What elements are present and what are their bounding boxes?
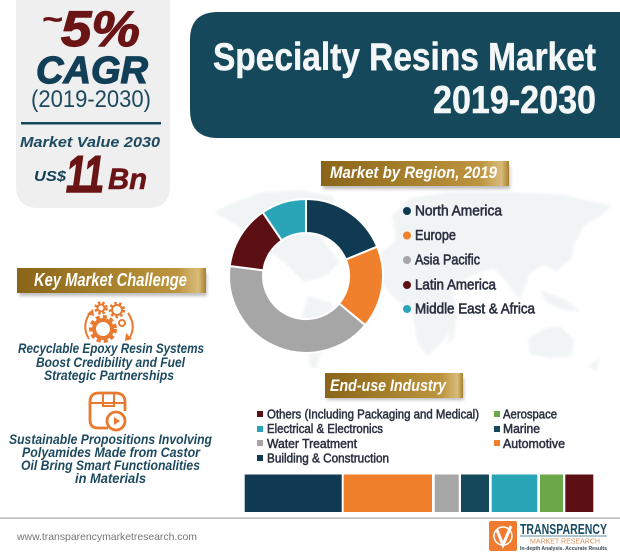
donut chart: market by region (229, 199, 383, 353)
heading: Key Market Challenge (17, 268, 207, 296)
icon: gears with arrows (85, 302, 133, 341)
CAGR value: 5% (61, 1, 140, 57)
title banner (190, 12, 620, 138)
legend item: Water Treatment: Water Treatment (267, 437, 358, 451)
panel: CAGR and market value (16, 0, 170, 208)
segment: Asia Pacific (229, 266, 365, 353)
heading: End-use Industry: End-use Industry (330, 376, 447, 395)
text: first challenge: Boost Credibility and Fuel (36, 354, 186, 370)
heading: Market by Region (321, 161, 510, 189)
legend item: Marine: Marine (503, 422, 540, 436)
segment: Latin America (230, 212, 282, 270)
legend: regions (403, 204, 536, 318)
legend item: Electrical & Electronics: Electrical & Electronics (267, 422, 383, 436)
text: first challenge: Strategic Partnerships (44, 367, 174, 383)
market value amount (34, 146, 147, 204)
text: second challenge (9, 431, 212, 486)
legend: end-use industries (257, 408, 565, 466)
legend item: Europe: Europe (415, 228, 456, 244)
legend item: Aerospace: Aerospace (503, 408, 557, 422)
stacked bar: end-use industry share (245, 474, 593, 512)
market value amount: Bn (108, 163, 147, 196)
market value amount: US$ (34, 168, 67, 185)
market value amount: 11 (66, 146, 104, 204)
CAGR value: ~ (42, 4, 62, 34)
footer website: www.transparencymarketresearch.com (16, 531, 197, 543)
segment: Europe (339, 247, 383, 325)
icon: package with play button (90, 393, 125, 430)
legend item: Middle East & Africa: Middle East & Africa (415, 302, 536, 318)
text: second challenge: in Materials (75, 470, 146, 486)
title text: 2019-2030 (433, 79, 596, 122)
CAGR period: (2019-2030) (31, 86, 151, 113)
logo: Transparency Market Research: MARKET RESEARCH (530, 536, 600, 546)
segment: Middle East & Africa (263, 199, 306, 240)
CAGR label: CAGR (36, 50, 149, 92)
title text (213, 36, 596, 122)
legend item: North America: North America (415, 204, 503, 220)
world map background (214, 190, 612, 372)
logo mark (489, 521, 517, 551)
panel background (16, 0, 170, 208)
logo: Transparency Market Research: In-depth Analysis. Accurate Results (520, 546, 607, 552)
segment: North America (306, 199, 377, 260)
legend item: Others: Others (Including Packaging and Medical) (267, 408, 479, 422)
text: second challenge: Sustainable Propositions Involving (9, 431, 212, 447)
legend item: Asia Pacific: Asia Pacific (415, 252, 480, 268)
heading: End-use Industry (325, 373, 464, 400)
heading: Market by Region: Market by Region, 2019 (330, 163, 497, 182)
logo: Transparency Market Research (489, 521, 607, 552)
text: first challenge: Recyclable Epoxy Resin Systems (18, 340, 204, 356)
text: first challenge (18, 340, 204, 383)
legend item: Building & Construction: Building & Construction (267, 452, 389, 466)
legend item: Latin America: Latin America (415, 278, 497, 294)
market value label: Market Value 2030 (20, 134, 161, 151)
heading: Key Market Challenge: Key Market Challenge (34, 270, 187, 290)
legend item: Automotive: Automotive (503, 437, 565, 451)
text: second challenge: Polyamides Made from Castor (22, 444, 201, 460)
text: second challenge: Oil Bring Smart Functionalities (21, 457, 200, 473)
